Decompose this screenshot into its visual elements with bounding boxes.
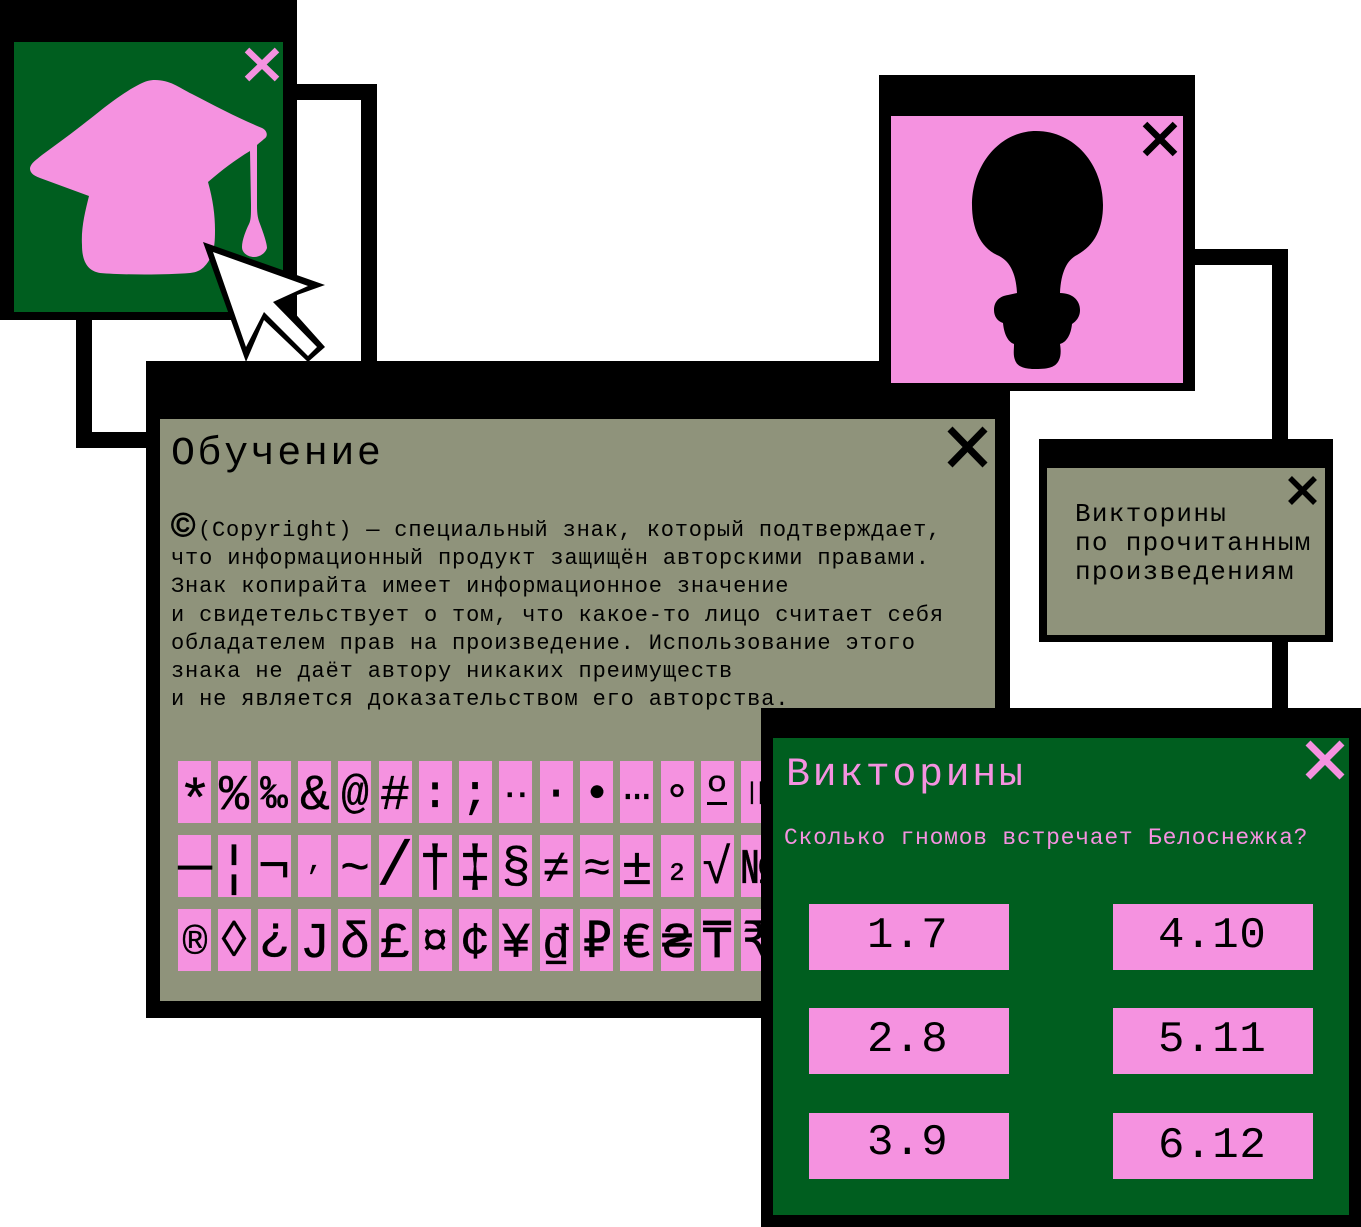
question: Сколько гномов встречает Белоснежка? xyxy=(784,825,1308,851)
text block: copyright explanation: знака не даёт автору никаких преимуществ xyxy=(171,659,733,684)
symbol tiles grid: № xyxy=(742,842,772,899)
symbol tiles grid: ¿ xyxy=(259,909,289,966)
answer buttons: 5.11 xyxy=(1158,1015,1266,1065)
symbol tiles grid: ‡ xyxy=(458,837,492,901)
text block: copyright explanation: обладателем прав на произведение. Использование этого xyxy=(171,631,916,656)
window: lamp xyxy=(879,75,1195,391)
symbol tiles grid: £ xyxy=(380,916,410,973)
text block: copyright explanation: Знак копирайта имеет информационное значение xyxy=(171,574,789,599)
symbol tiles grid: § xyxy=(501,841,531,898)
answer buttons: 3.9 xyxy=(867,1118,948,1168)
heading: learning: Обучение xyxy=(171,432,383,477)
symbol tiles grid xyxy=(177,761,774,973)
answer buttons: 4.10 xyxy=(1158,911,1266,961)
window: main learning panel xyxy=(146,361,1010,1018)
symbol tiles grid: ₴ xyxy=(662,916,692,973)
cursor arrow xyxy=(203,242,325,362)
symbol tiles grid: € xyxy=(622,916,652,973)
symbol tiles grid: † xyxy=(418,837,452,901)
symbol tiles grid: ® xyxy=(182,920,208,968)
symbol tiles grid: | xyxy=(754,780,768,807)
symbol tiles grid: / xyxy=(376,832,414,903)
symbol tiles grid: : xyxy=(421,769,449,821)
symbol tiles grid: | xyxy=(745,780,759,807)
answer buttons: 2.8 xyxy=(867,1015,948,1065)
symbol tiles grid: º xyxy=(704,770,730,818)
symbol tiles grid: ₸ xyxy=(702,916,732,973)
symbol tiles grid: ~ xyxy=(340,842,370,899)
icon: light bulb xyxy=(972,131,1103,369)
symbol tiles grid: ¢ xyxy=(460,916,490,973)
symbol tiles grid: ₹ xyxy=(742,916,772,973)
text block: quizzes on read works xyxy=(1075,499,1312,587)
answer buttons: 1.7 xyxy=(867,911,948,961)
symbol tiles grid: ₫ xyxy=(542,919,570,971)
text block: copyright explanation: и свидетельствует о том, что какое-то лицо считает себя xyxy=(171,603,944,628)
text block: copyright explanation: (Copyright) — специальный знак, который подтверждает, xyxy=(198,518,941,543)
symbol tiles grid: ¥ xyxy=(501,916,531,973)
symbol tiles grid: J xyxy=(300,916,330,973)
symbol tiles grid: ≈ xyxy=(583,844,611,896)
symbol tiles grid: & xyxy=(300,768,330,825)
symbol tiles grid: # xyxy=(380,768,410,825)
symbol tiles grid: ₽ xyxy=(582,916,612,973)
connector: lamp window to small window and quiz xyxy=(1190,249,1288,716)
answer buttons xyxy=(809,904,1313,1179)
symbol tiles grid: · xyxy=(542,768,570,820)
symbol tiles grid: ◊ xyxy=(219,915,249,972)
icon: graduation cap xyxy=(30,80,267,274)
text block: quizzes on read works: по прочитанным xyxy=(1075,528,1312,558)
text block: copyright explanation xyxy=(171,506,944,712)
symbol tiles grid: … xyxy=(623,761,651,813)
symbol tiles grid: ° xyxy=(663,777,691,829)
symbol tiles grid: * xyxy=(178,771,212,835)
text block: quizzes on read works: произведениям xyxy=(1075,557,1295,587)
answer buttons: 6.12 xyxy=(1158,1121,1266,1171)
symbol tiles grid: ¤ xyxy=(421,917,449,969)
symbol tiles grid: ; xyxy=(461,769,489,821)
symbol tiles grid: ¦ xyxy=(218,839,250,900)
window: graduation cap xyxy=(0,0,297,320)
symbol tiles grid: • xyxy=(583,769,611,821)
symbol tiles grid: @ xyxy=(341,769,369,821)
text block: copyright explanation: © xyxy=(171,506,195,543)
symbol tiles grid: — xyxy=(177,835,212,899)
connector: cap window to main window xyxy=(76,84,377,448)
symbol tiles grid: √ xyxy=(702,842,732,899)
window: quiz xyxy=(761,708,1361,1227)
symbol tiles grid: ‥ xyxy=(503,766,529,809)
icon: close cross xyxy=(1290,478,1315,503)
symbol tiles grid: ² xyxy=(665,859,689,904)
icon: close cross xyxy=(950,429,985,465)
window: small quiz note xyxy=(1039,439,1333,642)
icon: close cross xyxy=(247,50,277,79)
symbol tiles grid: % xyxy=(219,768,250,825)
icon: close cross xyxy=(1308,743,1342,777)
text block: quizzes on read works: Викторины xyxy=(1075,499,1227,529)
symbol tiles grid: δ xyxy=(340,916,370,973)
text block: copyright explanation: что информационный продукт защищён авторскими правами. xyxy=(171,546,930,571)
heading: quizzes: Викторины xyxy=(786,753,1025,798)
underline of ordinal sign xyxy=(707,802,727,805)
symbol tiles grid: ≠ xyxy=(542,844,570,896)
icon: close cross xyxy=(1145,124,1175,154)
symbol tiles grid: ‰ xyxy=(260,770,288,822)
symbol tiles grid: ± xyxy=(621,841,653,900)
symbol tiles grid: ¬ xyxy=(258,838,290,899)
symbol tiles grid: , xyxy=(307,847,323,878)
text block: copyright explanation: и не является доказательством его авторства. xyxy=(171,687,789,712)
